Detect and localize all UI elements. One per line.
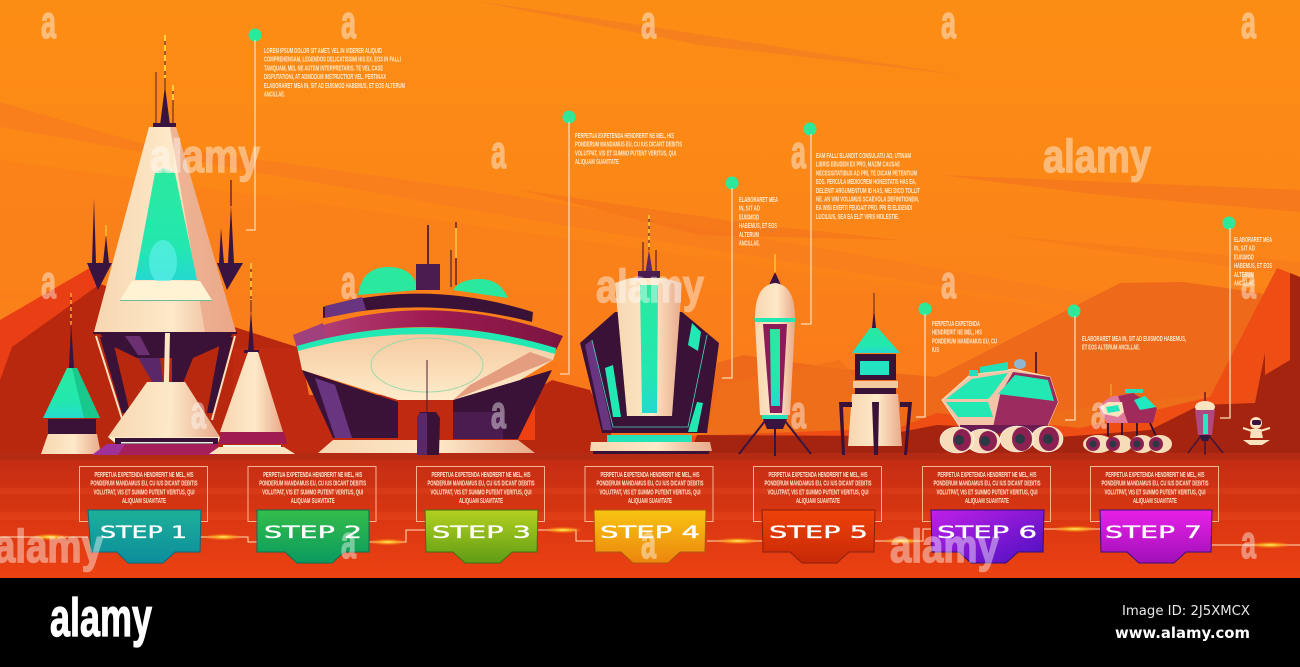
step 2 description [259,472,366,505]
building: dome base [293,222,563,455]
step 7 description: VOLUTPAT, VIS ET SUMMO PUTENT VERITUS, QUI [1104,489,1206,496]
watermarks: a [1241,516,1256,568]
callout 3 text: ANCILLAE. [739,240,760,248]
step 6 description: PERPETUA EXPETENDA HENDRERIT NE MEL, HIS [938,472,1037,479]
step 1 description: ALIQUAM SUAVITATE [122,498,166,505]
watermarks: a [491,126,506,178]
dark upper band [323,294,533,322]
callout 2 text [575,133,682,166]
front beacon [426,360,428,413]
watermarks: a [341,256,356,308]
step 3 description: VOLUTPAT, VIS ET SUMMO PUTENT VERITUS, QUI [430,489,532,496]
platform [92,444,218,455]
callout 4 text: LUCILIUS, SEA EA ELIT VIRIS MOLESTIE. [816,214,899,221]
callout 4 [801,122,920,324]
footer website: www.alamy.com [1115,624,1250,642]
step 3 panel [416,466,544,563]
step 1 description: PONDERUM MANDAMUS EU, CU IUS DICANT DEBITIS [90,481,198,488]
callout 7 text: HABEMUS, ET EOS [1234,263,1272,270]
callout 3 text: HABEMUS, ET EOS [739,223,777,230]
main cone [94,127,236,332]
watermarks: alamy [150,130,260,182]
callout 1 text: DISPUTATIONI, AT ADMODUM INSTRUCTIOR VEL. PERTINAX [264,74,386,81]
step 6 description: ALIQUAM SUAVITATE [965,498,1009,505]
callout 2 text: PERPETUA EXPETENDA HENDRERIT NE MEL, HIS [575,133,674,140]
step 4 badge: STEP 4 [600,523,700,543]
step 3 description: PONDERUM MANDAMUS EU, CU IUS DICANT DEBITIS [428,481,535,488]
watermarks: a [1091,386,1106,438]
callout 4 text: LIBRIS EBUDEM EX PRO, MAZIM CAUSAE [816,162,900,169]
step 6 description [934,472,1041,505]
step 5 badge: STEP 5 [769,523,868,543]
step 5 description: ALIQUAM SUAVITATE [796,498,840,505]
callout 2 text: ALIQUAM SUAVITATE [575,159,619,166]
building: rocket [739,254,811,456]
watermarks: alamy [890,520,999,572]
step 4 description: VOLUTPAT, VIS ET SUMMO PUTENT VERITUS, QUI [600,489,701,496]
callout 7 [1220,216,1272,418]
step 7 description [1102,472,1209,505]
callout 3 [722,176,778,378]
watermarks: alamy [596,260,704,312]
callout 4 text: NE. AN VIM VOLUMUS SCAEVOLA DEFINITIONEM, [816,196,919,204]
step 6 description: PONDERUM MANDAMUS EU, CU IUS DICANT DEBITIS [934,481,1041,488]
watermarks: alamy [1043,130,1151,182]
step 2 badge: STEP 2 [264,523,362,543]
watermarks: a [641,516,656,568]
vehicle: small rover [1083,384,1172,453]
step 2 description: VOLUTPAT, VIS ET SUMMO PUTENT VERITUS, QUI [262,489,363,496]
step 7 badge: STEP 7 [1105,523,1202,543]
callout 6 text [1082,336,1186,352]
footer logo: alamy [50,588,152,648]
watermarks: a [791,386,806,438]
step 1 description: PERPETUA EXPETENDA HENDRERIT NE MEL, HIS [94,472,194,479]
callout 4 text [816,153,920,221]
callout 6 text: ELABORARET MEA IN, SIT AD EUISMOD HABEMUS, [1082,336,1186,343]
callout 1 text: ANCILLAE. [264,92,285,98]
callout 1 text [264,48,405,98]
step 7 panel [1090,466,1218,563]
callout 1 [246,28,405,230]
vehicle: large rover [940,352,1063,453]
callout 5 text: PONDERUM MANDAMUS EU, CU [932,338,997,345]
callout 1 text: TAMQUAM, MEL NE AUTEM INTERPRETARIS. TE VEL CASE [264,65,383,72]
watermarks: a [41,256,56,308]
step 6 badge: STEP 6 [937,523,1037,543]
callout 7 text: ANCILLAE. [1234,280,1255,288]
callout 4 text: EAM FALLI BLANDIT CONSULATU AD, UTINAM [816,153,911,160]
callout 6 [1065,304,1186,420]
vehicle: small rocket [1188,392,1223,455]
step 6 panel [922,466,1050,563]
step 4 panel [585,466,713,563]
step 1 description: VOLUTPAT, VIS ET SUMMO PUTENT VERITUS, QUI [94,489,195,496]
step 5 description: PERPETUA EXPETENDA HENDRERIT NE MEL, HIS [768,472,868,479]
step 2 description: PERPETUA EXPETENDA HENDRERIT NE MEL, HIS [263,472,362,479]
step 6 description: VOLUTPAT, VIS ET SUMMO PUTENT VERITUS, QUI [936,489,1038,496]
watermarks: a [1241,256,1256,308]
background: ground [0,453,1300,578]
callout 6 text: ET EOS ALTERUM ANCILLAE. [1082,345,1140,352]
step 5 description [764,472,872,505]
callout 7 text: EUISMOD [1234,254,1254,261]
step 4 description: PONDERUM MANDAMUS EU, CU IUS DICANT DEBITIS [596,481,704,488]
step 3 badge: STEP 3 [432,523,531,543]
building: tall tower with spires [87,35,243,455]
step 7 description: PONDERUM MANDAMUS EU, CU IUS DICANT DEBITIS [1102,481,1209,488]
cream body [298,334,555,400]
callout 2 text: VOLUTPAT, VIS ET SUMMO PUTENT VERITUS, QUI [575,150,676,157]
step 1 badge: STEP 1 [100,523,187,543]
building: right small cone [209,263,295,454]
callout 2 [560,110,682,374]
callout 3 text: EUISMOD [739,214,759,221]
callout 1 text: COMPREHENSAM, LEGENDOS DELICATISSIMI HIS EX. EOS IN FALLI [264,57,401,64]
magenta band [293,310,563,350]
callout 4 text: EOS. PERCULA MEDIOCREM HONESTATIS HAS EA, [816,179,916,186]
platform [318,440,535,453]
callout 5 text [932,321,997,354]
step 3 description: PERPETUA EXPETENDA HENDRERIT NE MEL, HIS [432,472,531,479]
watermarks: a [491,386,506,438]
step 3 description: ALIQUAM SUAVITATE [459,498,503,505]
callout 7 text: ELABORARET MEA [1234,237,1272,244]
top spire [164,35,166,90]
callout 5 text: IUS [932,347,939,354]
purple hourglass and legs [100,337,130,413]
watermarks: a [191,386,206,438]
watermarks: a [941,256,956,308]
callout 1 text: ELABORARET MEA IN, SIT AD EUISMOD HABEMUS, ET EOS ALTERUM [264,83,405,90]
callout 5 text: PERPETUA EXPETENDA [932,321,980,328]
timeline connector with glows [0,526,1300,548]
watermarks: a [791,126,806,178]
building: green-roof tower [839,293,912,455]
callout 4 text: DELENIT ARGUMENTUM ID HAS, MEI DICO TOLLIT [816,188,920,195]
callout 7 text: ALTERUM [1234,272,1254,279]
watermarks: a [341,516,356,568]
footer image id: Image ID: 2J5XMCX [1122,604,1250,619]
domes [358,267,418,295]
side spires [87,198,243,290]
green stripe [297,327,556,355]
step 1 panel [80,466,208,563]
antennas [427,225,429,265]
callout 5 [916,302,997,417]
step 2 panel [248,466,376,563]
dark lower shells [302,370,398,438]
step 5 panel [754,466,882,563]
building: small left tower [41,293,101,454]
base cone [108,382,220,437]
background: Mars mountains [0,262,1300,455]
callout 7 text: IN, SIT AD [1234,246,1255,253]
callout 3 text: IN, SIT AD [739,206,760,213]
callout 4 text: NECESSITATIBUS AD PRI, TE DICAM PETENTIUM [816,170,917,177]
step 2 description: ALIQUAM SUAVITATE [291,498,335,505]
callout 3 text [739,197,778,248]
background: Martian sky [0,0,1300,460]
callout 1 text: LOREM IPSUM DOLOR SIT AMET, VEL IN VIDERER ALIQUID [264,48,382,55]
black footer band [0,578,1300,667]
astronaut [1243,417,1270,445]
step 4 description: ALIQUAM SUAVITATE [628,498,672,505]
callout 7 text [1234,237,1272,288]
step 5 description: VOLUTPAT, VIS ET SUMMO PUTENT VERITUS, QUI [768,489,869,496]
step 4 description [596,472,704,505]
step 7 description: PERPETUA EXPETENDA HENDRERIT NE MEL, HIS [1106,472,1205,479]
building: pentagon tower [580,215,719,454]
callout 3 text: ALTERUM [739,232,759,239]
step 4 description: PERPETUA EXPETENDA HENDRERIT NE MEL, HIS [600,472,700,479]
step 1 description [90,472,198,505]
callout 2 text: PONDERUM MANDAMUS EU, CU IUS DICANT DEBITIS [575,142,682,149]
step 7 description: ALIQUAM SUAVITATE [1133,498,1177,505]
callout 4 text: EA WISI EVERTI FEUGAIT PRO. PRI EI ELIGENDI [816,205,912,212]
step 5 description: PONDERUM MANDAMUS EU, CU IUS DICANT DEBITIS [764,481,872,488]
callout 3 text: ELABORARET MEA [739,197,778,204]
step 3 description [428,472,535,505]
step 2 description: PONDERUM MANDAMUS EU, CU IUS DICANT DEBITIS [259,481,366,488]
callout 5 text: HENDRERIT NE MEL, HIS [932,330,982,337]
